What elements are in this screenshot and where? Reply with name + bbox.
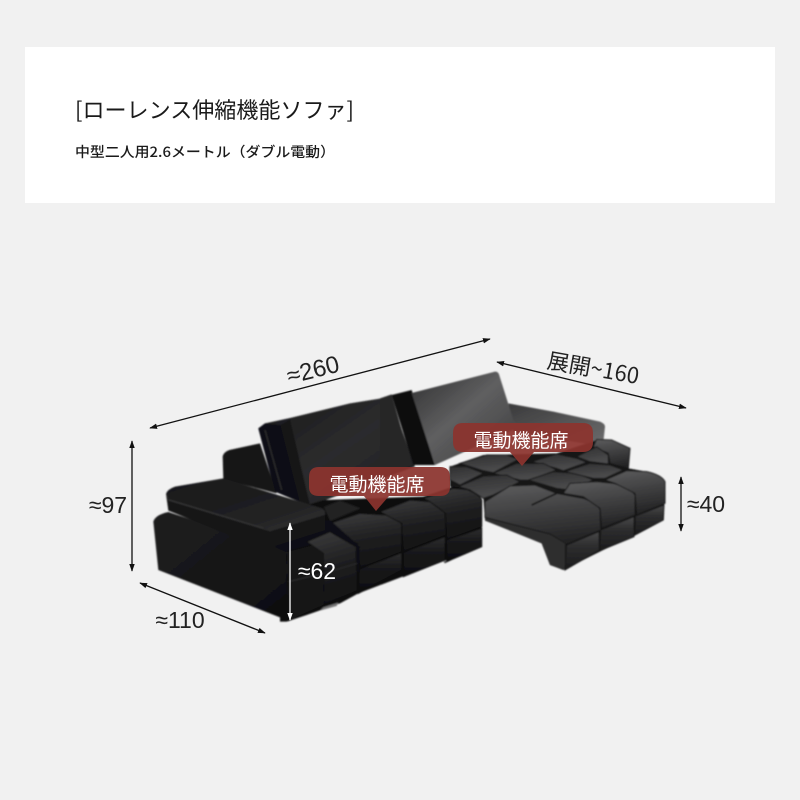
callout: right electric seat: 電動機能席 <box>473 426 569 453</box>
depth dimension: ≈110 <box>155 607 205 633</box>
arm end cells <box>287 544 324 621</box>
callout: right electric seat <box>453 423 593 466</box>
back cushion left <box>258 397 415 505</box>
seat silhouette <box>280 487 482 622</box>
front lower tufts <box>565 532 599 570</box>
width dimension <box>150 339 490 428</box>
front top tufts <box>485 485 601 544</box>
arm cushion <box>166 478 325 530</box>
chaise silhouette <box>450 440 665 570</box>
extended dimension: 展開~160 <box>545 343 642 391</box>
back seat tufts <box>323 500 362 522</box>
arm base <box>153 512 288 621</box>
chaise height dimension: ≈40 <box>687 491 725 517</box>
sofa foot <box>320 603 338 611</box>
callout: left electric seat <box>309 467 450 511</box>
chaise height dimension <box>681 477 725 531</box>
extended dimension <box>497 343 686 408</box>
height dimension: ≈97 <box>89 492 127 518</box>
seat section <box>280 487 482 622</box>
back cushion right <box>380 372 520 477</box>
underside strip <box>485 516 565 570</box>
height dimension <box>89 441 132 571</box>
title: [ローレンス伸縮機能ソファ] <box>75 93 354 125</box>
callout: left electric seat: 電動機能席 <box>329 470 425 497</box>
subtitle: 中型二人用2.6メートル（ダブル電動） <box>75 142 335 162</box>
far arm <box>508 403 605 445</box>
near back arm <box>223 443 277 493</box>
header panel <box>25 47 775 203</box>
far tufts <box>593 439 630 468</box>
sofa illustration <box>153 372 665 622</box>
middle tufts <box>458 475 520 498</box>
arm height dimension: ≈62 <box>298 558 336 584</box>
width dimension: ≈260 <box>284 351 342 390</box>
arm backing <box>263 520 360 621</box>
seat tufts <box>330 513 402 568</box>
arm assembly <box>153 478 360 621</box>
chaise <box>450 439 665 570</box>
depth dimension <box>140 583 265 633</box>
arm height dimension <box>290 523 336 620</box>
